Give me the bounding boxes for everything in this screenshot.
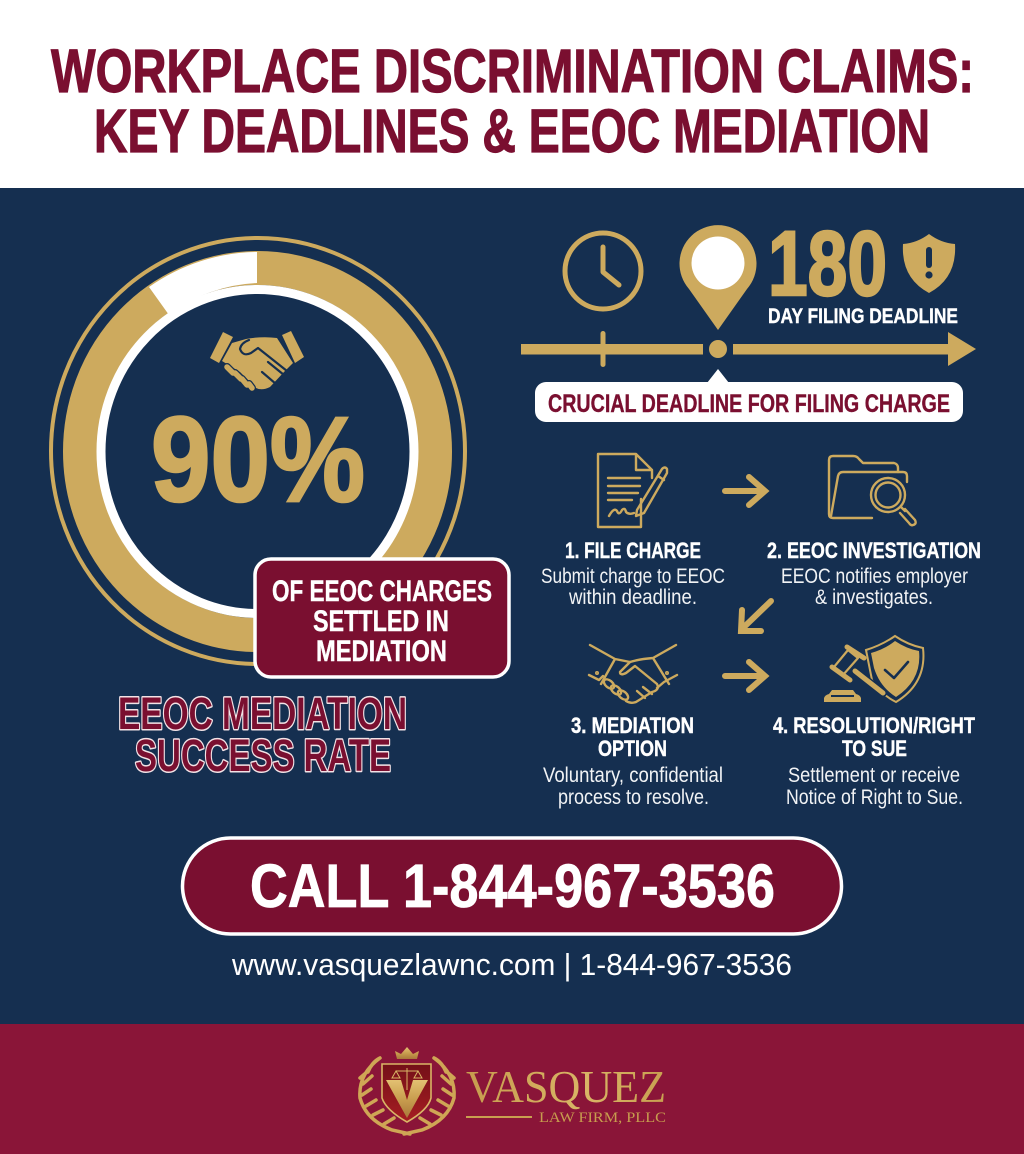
v monogram — [386, 1080, 428, 1118]
step 2: investigation: 2. EEOC INVESTIGATION — [767, 538, 981, 563]
step 2: investigation: EEOC notifies employer — [781, 565, 968, 588]
laurel right — [404, 1058, 454, 1134]
icon: warning shield — [903, 234, 955, 293]
icon: document and pen — [598, 454, 667, 527]
heading: success rate — [118, 688, 407, 781]
step 4: resolution: TO SUE — [842, 736, 907, 761]
step 4: resolution: Notice of Right to Sue. — [786, 786, 963, 809]
logo wordmark: VASQUEZ — [466, 1062, 666, 1112]
callout: charges settled: SETTLED IN — [313, 605, 449, 638]
footer band — [0, 1024, 1024, 1154]
callout: charges settled: OF EEOC CHARGES — [272, 575, 492, 608]
big number 90 percent: 90% — [151, 391, 365, 527]
logo emblem — [360, 1047, 454, 1134]
step 1: file charge: 1. FILE CHARGE — [565, 538, 701, 563]
call to action button — [182, 838, 842, 934]
callout: charges settled: MEDIATION — [316, 635, 447, 668]
call to action button: CALL 1-844-967-3536 — [250, 852, 775, 920]
icon: folder and magnifier — [829, 456, 916, 525]
laurel left — [360, 1058, 410, 1134]
step 3: mediation: OPTION — [598, 736, 667, 761]
icon: solid handshake — [210, 331, 304, 389]
step 4: resolution: 4. RESOLUTION/RIGHT — [773, 713, 975, 738]
label: day filing deadline: DAY FILING DEADLINE — [768, 305, 958, 328]
step 2: investigation — [767, 456, 981, 609]
logo subtitle: LAW FIRM, PLLC — [539, 1110, 666, 1126]
contact line: www.vasquezlawnc.com | 1-844-967-3536 — [231, 947, 792, 982]
timeline arrow — [521, 331, 976, 367]
step 4: resolution — [773, 636, 975, 809]
step 2: investigation: & investigates. — [815, 586, 933, 609]
arrow: step 3 to 4 — [725, 662, 765, 690]
callout: crucial deadline — [535, 369, 963, 422]
step 1: file charge: Submit charge to EEOC — [541, 565, 725, 588]
step 3: mediation: Voluntary, confidential — [543, 764, 723, 787]
header panel — [0, 0, 1024, 188]
step 3: mediation: process to resolve. — [558, 786, 709, 809]
step 3: mediation — [543, 645, 723, 809]
icon: location pin — [680, 225, 756, 330]
number 180: 180 — [768, 213, 887, 315]
heading: success rate: SUCCESS RATE — [135, 730, 391, 781]
arrow: step 1 to 2 — [725, 477, 765, 505]
heading: success rate: EEOC MEDIATION — [118, 688, 407, 739]
donut chart: 90 percent — [51, 238, 465, 664]
icon: clock — [565, 233, 641, 309]
callout: charges settled — [255, 559, 509, 677]
step 3: mediation: 3. MEDIATION — [571, 713, 694, 738]
scales — [392, 1068, 422, 1090]
step 4: resolution: Settlement or receive — [788, 764, 960, 787]
crown — [395, 1047, 419, 1059]
shield — [382, 1064, 431, 1122]
step 1: file charge: within deadline. — [568, 586, 697, 609]
step 1: file charge — [541, 454, 725, 609]
arrow: step 2 to 3 — [741, 601, 771, 631]
white 10 percent segment — [149, 252, 257, 315]
icon: outlined handshake — [589, 645, 677, 703]
logo line — [466, 1116, 532, 1118]
icon: gavel and shield — [824, 636, 923, 702]
